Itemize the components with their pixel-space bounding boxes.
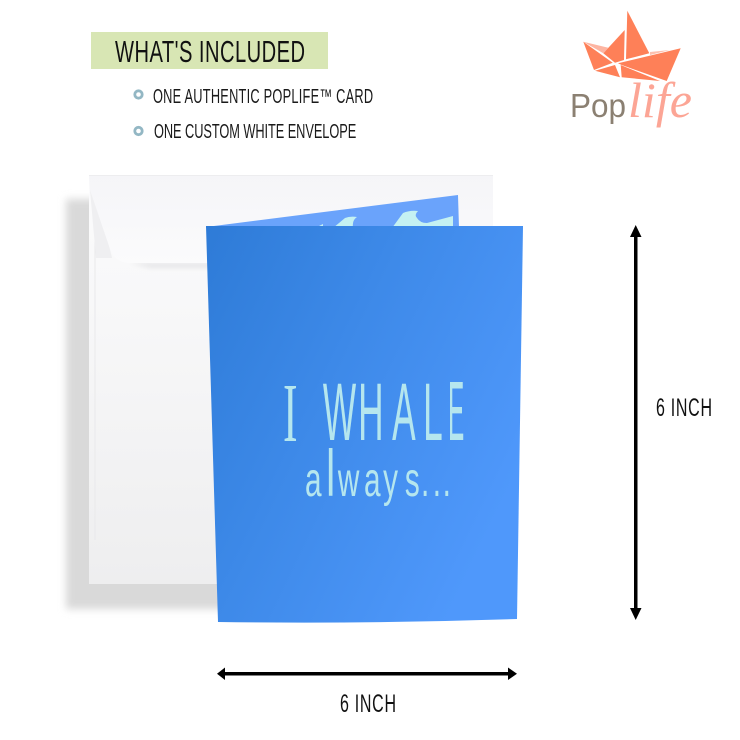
card text: always: always... [305,436,451,510]
envelope flap shadow [130,263,490,268]
bullet: card item [135,91,142,98]
envelope flap [89,175,493,263]
arrow: width dimension [217,668,517,680]
label: height: 6 INCH [656,395,712,422]
card text: i whale: I [283,367,298,460]
card front [206,226,523,623]
envelope shadow [66,199,286,609]
card text: i whale: E [448,365,464,459]
wordmark: life: life [628,72,692,128]
wordmark: pop: Pop [570,87,626,124]
card back panel [206,195,459,228]
logo: poplife [570,11,692,128]
text: card item: ONE AUTHENTIC POPLIFE™ CARD [153,85,373,108]
icon: origami boat [583,11,681,81]
envelope side seam [94,200,96,540]
arrow: height dimension [630,225,642,620]
envelope with shadow [66,175,493,609]
envelope side shade behind flap [90,190,112,258]
wave cutouts [315,211,453,228]
heading: what's included: WHAT'S INCLUDED [115,36,305,69]
text: envelope item: ONE CUSTOM WHITE ENVELOPE [154,120,356,143]
greeting card [206,195,523,623]
bullet: envelope item [135,127,142,135]
card text: i whale [283,365,464,460]
label: width: 6 INCH [340,691,396,718]
envelope body [89,175,493,584]
card text: i whale: WHAL [323,367,443,458]
envelope top edge [89,175,493,176]
list: included items [135,85,373,143]
